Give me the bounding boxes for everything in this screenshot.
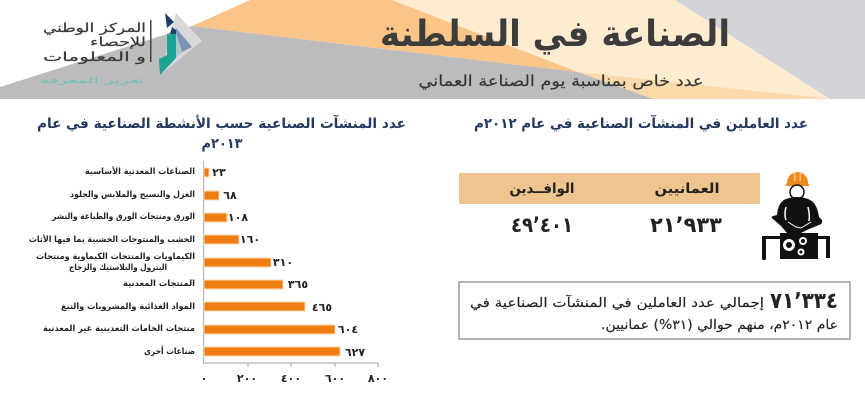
table header band bbox=[459, 173, 760, 204]
logo text: للإحصاء bbox=[90, 34, 146, 49]
chart heading: ٢٠١٣م bbox=[202, 136, 243, 152]
logo mark bbox=[159, 13, 202, 75]
column: Omanis bbox=[650, 181, 722, 237]
callout text: إجمالي عدد العاملين في المنشآت الصناعية في bbox=[470, 294, 764, 311]
bar values: ١٦٠ bbox=[240, 233, 260, 246]
bar values: ٦٠٤ bbox=[338, 323, 358, 336]
bars bbox=[204, 168, 340, 356]
category labels: صناعات أخرى bbox=[144, 345, 195, 357]
category labels: منتجات الخامات التعدينية غير المعدنية bbox=[43, 324, 195, 334]
bar chart bbox=[29, 161, 388, 385]
callout: total workers bbox=[459, 282, 850, 339]
category labels: البترول والبلاستيك والزجاج bbox=[69, 263, 167, 273]
category labels: الغزل والنسيج والملابس والجلود bbox=[70, 190, 195, 200]
axis labels bbox=[201, 372, 388, 385]
workers heading: عدد العاملين في المنشآت الصناعية في عام ٢٠١٢م bbox=[474, 114, 808, 132]
desk with gears bbox=[762, 237, 766, 260]
chart heading: عدد المنشآت الصناعية حسب الأنشطة الصناعية في عام bbox=[37, 114, 406, 132]
torso and arms bbox=[772, 197, 822, 233]
logo divider bbox=[150, 20, 152, 62]
bar values: ٢٣ bbox=[212, 166, 226, 179]
logo text: المركز الوطني bbox=[43, 20, 146, 36]
subtitle: عدد خاص بمناسبة يوم الصناعة العماني bbox=[418, 72, 704, 91]
category labels: المنتجات المعدنية bbox=[123, 279, 195, 289]
category labels: الخشب والمنتوجات الخشبية بما فيها الأثاث bbox=[29, 234, 195, 245]
icon: worker with gears bbox=[762, 172, 830, 260]
header band bbox=[0, 0, 865, 99]
callout text: عام ٢٠١٢م، منهم حوالي (٣١%) عمانيين. bbox=[601, 318, 838, 333]
category labels: الورق ومنتجات الورق والطباعة والنشر bbox=[51, 212, 195, 222]
category labels bbox=[29, 166, 195, 357]
chart heading bbox=[37, 114, 406, 152]
logo text bbox=[43, 20, 146, 65]
panel: workers bbox=[459, 114, 850, 339]
helmet bbox=[786, 172, 810, 186]
column: Omanis: العمانيين bbox=[654, 181, 720, 197]
column: expatriates bbox=[510, 181, 574, 237]
bar values: ٦٨ bbox=[223, 189, 237, 202]
logo bbox=[40, 13, 202, 85]
bar values: ٦٢٧ bbox=[345, 346, 365, 359]
column: expatriates: ٤٩٬٤٠١ bbox=[511, 213, 573, 237]
axis labels: ٤٠٠ bbox=[281, 372, 301, 385]
callout total figure: ٧١٬٣٣٤ bbox=[770, 289, 838, 314]
axis labels: ٨٠٠ bbox=[368, 372, 388, 385]
face bbox=[790, 185, 804, 199]
panel: establishments by activity bbox=[29, 114, 406, 385]
bar values bbox=[212, 166, 365, 359]
column: expatriates: الوافــدين bbox=[510, 181, 574, 197]
category labels: المواد الغذائية والمشروبات والتبغ bbox=[61, 302, 195, 312]
bar values: ٣١٠ bbox=[273, 256, 293, 269]
title: الصناعة في السلطنة bbox=[380, 14, 730, 55]
workers table bbox=[459, 173, 760, 237]
axis labels: ٠ bbox=[201, 372, 207, 385]
category labels: الصناعات المعدنية الأساسية bbox=[85, 166, 195, 177]
bar values: ١٠٨ bbox=[228, 211, 248, 224]
logo tagline: تعزيز المعرفة bbox=[40, 76, 144, 85]
logo text: و المعلومات bbox=[43, 49, 146, 65]
callout text bbox=[470, 294, 838, 333]
axes bbox=[204, 161, 378, 367]
bar values: ٤٦٥ bbox=[312, 301, 332, 314]
axis labels: ٦٠٠ bbox=[325, 372, 345, 385]
axis labels: ٢٠٠ bbox=[237, 372, 257, 385]
category labels: الكيماويات والمنتجات الكيماوية ومنتجات bbox=[36, 252, 195, 262]
bar values: ٣٦٥ bbox=[288, 278, 308, 291]
column: Omanis: ٢١٬٩٣٣ bbox=[650, 213, 722, 237]
